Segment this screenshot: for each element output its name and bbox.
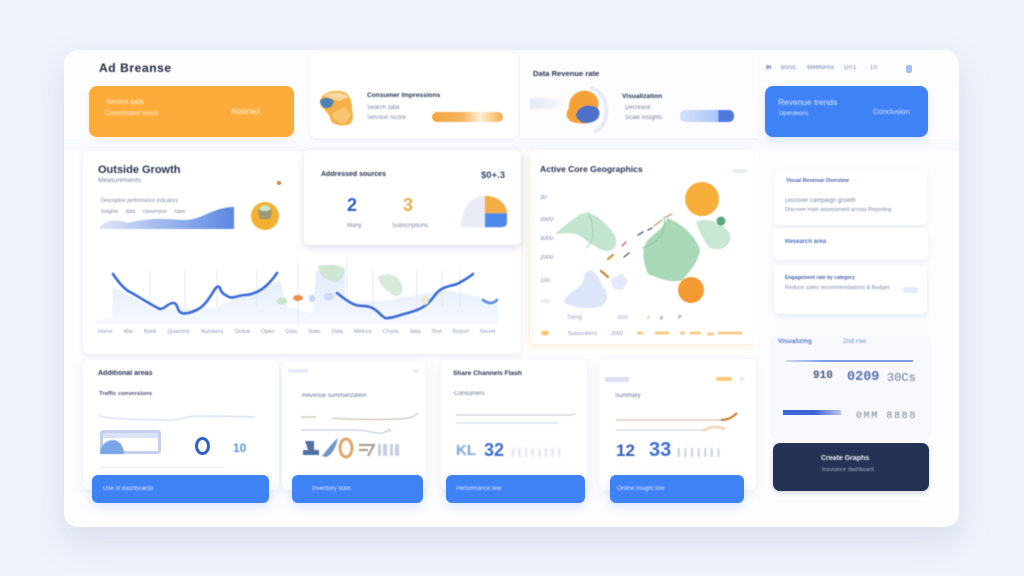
stats divider line	[786, 360, 913, 362]
button: card three	[446, 475, 585, 503]
button three label: Performance line	[456, 486, 501, 492]
nav item: date: D01	[844, 65, 857, 71]
panel: bottom card one	[83, 360, 279, 490]
button one label: Use of dashboards	[103, 486, 153, 492]
card three faded bars: IIIIIIII	[511, 445, 564, 460]
map marker: green	[716, 216, 726, 226]
map bottom label row	[567, 314, 682, 321]
metric caption one: Many	[347, 223, 362, 229]
axis label four: 2000	[540, 255, 553, 261]
metric number orange: 3	[403, 195, 413, 215]
map legend row: 2000	[611, 331, 623, 337]
orange panel label: Recent data	[106, 99, 144, 106]
insight two heading: Research area	[785, 239, 826, 245]
icon: orange head	[319, 90, 354, 126]
dark button caption: Insurance dashboard	[822, 467, 874, 473]
stats highlighted value: 0209	[847, 370, 879, 385]
card three heading: Share Channels Flash	[453, 370, 522, 377]
overview heading: Data Revenue rate	[533, 69, 599, 78]
insight three heading: Engagement rate by category	[785, 275, 855, 281]
axis label five: 100	[540, 278, 550, 284]
map circle: yellow	[685, 182, 719, 216]
metrics value: $0+.3	[481, 170, 505, 181]
stat line one: Search data	[367, 105, 399, 111]
area chart	[99, 206, 235, 230]
card four badge	[716, 377, 732, 381]
dark button title: Create Graphs	[821, 455, 869, 462]
map region: right green	[696, 220, 730, 249]
axis label one: 30	[540, 195, 547, 201]
metrics heading: Addressed sources	[321, 171, 386, 178]
insight one line one: Discover campaign growth	[785, 198, 856, 204]
card two dot	[414, 369, 418, 373]
overview line two: Scale Insights	[625, 115, 662, 121]
card two heading: Revenue summarization	[302, 393, 367, 399]
line chart	[96, 259, 499, 326]
map illustration	[540, 181, 743, 337]
map bottom label row: 2000	[617, 315, 628, 321]
blue panel value: Conclusion	[873, 107, 910, 116]
nav badge	[906, 65, 912, 73]
insight three tag	[903, 287, 918, 293]
card three label: KL	[456, 442, 476, 459]
map bottom label row: Sting	[567, 314, 582, 321]
panel: right side column	[760, 151, 959, 491]
map trail dashes	[601, 214, 672, 277]
stats group tag: 2nd row	[843, 338, 866, 345]
map region: left green	[555, 213, 616, 251]
orange panel caption: Coordinated result	[105, 110, 158, 117]
button: card two	[292, 475, 423, 503]
card two icon row	[302, 436, 400, 460]
stats first row values: 910	[813, 370, 833, 382]
panel: map card	[530, 150, 759, 344]
panel: orange summary	[89, 86, 294, 137]
card one subheading: Traffic conversions	[99, 391, 152, 397]
map card pale tag	[732, 169, 747, 173]
dashboard frame	[64, 50, 959, 527]
metric caption two: Subscriptions	[392, 223, 428, 229]
pie chart	[461, 195, 508, 228]
card four heading: Summary	[615, 393, 641, 399]
axis label six: 100	[540, 299, 550, 305]
blue panel label: Revenue trends	[778, 97, 837, 107]
blue panel caption: Operations	[779, 111, 808, 117]
nav item: webforms: Webforms	[807, 65, 834, 71]
progress bar: orange	[432, 112, 503, 122]
overview line one: Decrease	[625, 105, 651, 111]
stats group heading: Visualizing	[778, 338, 812, 345]
map axis labels	[540, 194, 554, 305]
card one ring	[195, 437, 210, 455]
panel: large line chart card	[83, 151, 521, 354]
metric number blue: 2	[347, 195, 357, 215]
stat line two: Session Score	[367, 115, 406, 121]
map card heading: Active Core Geographics	[540, 164, 643, 174]
top nav	[766, 64, 912, 73]
card four tag	[605, 377, 629, 382]
overview heading two: Visualization	[622, 93, 662, 100]
card one value: 10	[233, 441, 246, 455]
icon: orange bowl	[250, 201, 280, 231]
button: card one	[92, 475, 269, 503]
card one sparkline	[98, 414, 256, 422]
nav item: count: · 10	[865, 65, 878, 71]
card four value left: 12	[616, 441, 635, 460]
button four label: Online insight line	[617, 486, 664, 492]
button: dark call to action	[773, 443, 929, 491]
panel: bottom card two	[282, 362, 426, 490]
card: stats group	[770, 335, 932, 440]
chart card subheading: Measurements	[98, 177, 141, 184]
map region: centre green	[643, 218, 700, 281]
card four sparklines	[616, 412, 738, 432]
card one heading: Additional areas	[98, 370, 152, 377]
panel: blue summary	[765, 86, 928, 137]
area legend text: Descriptive performance indicators	[101, 198, 178, 204]
decorative pale bar	[530, 98, 565, 109]
map circle: orange	[678, 277, 704, 303]
map region: blue	[564, 270, 607, 308]
chart axis labels: Home Mar Bank Quarterly Numbers Global Open Data Stats Data Metrics Charts data Text Report Server	[98, 329, 496, 335]
card two sparklines	[300, 412, 418, 434]
orange panel value: Abstract	[231, 107, 260, 116]
panel: white backing behind map	[521, 150, 759, 354]
card three sparklines	[456, 412, 576, 424]
button: card four	[610, 475, 744, 503]
card one gauge box	[100, 430, 161, 454]
card: insight three	[774, 265, 927, 314]
panel: bottom card four	[599, 359, 756, 490]
map bottom label row: o	[647, 315, 650, 321]
panel: audience stat	[310, 52, 518, 138]
stats third value: 30Cs	[887, 371, 916, 385]
panel: bottom card three	[441, 360, 587, 490]
nav item: service: Bsrvc	[781, 65, 796, 71]
progress bar: blue	[680, 110, 734, 122]
card four dot	[740, 377, 744, 381]
insight one line two: Discover main assessment across Reporting	[785, 207, 892, 213]
card three subheading: Consumers	[454, 391, 485, 397]
nav item: in: In	[766, 65, 771, 71]
map bottom label row: p	[660, 315, 663, 321]
stats lower bar	[783, 410, 841, 415]
card two tag	[288, 369, 308, 373]
title: Ad Breanse	[99, 61, 172, 75]
map legend row: Subscribers	[568, 331, 597, 337]
axis label two: 3500	[540, 217, 553, 223]
stat heading: Consumer Impressions	[367, 92, 440, 99]
card four faded bars: IIIIIII	[677, 445, 723, 460]
panel: metrics with pie	[304, 150, 521, 245]
button two label: Inventory stats	[312, 486, 351, 492]
area legend text two: Insights data conversion rates	[101, 209, 185, 215]
card three value: 32	[484, 440, 504, 460]
card: insight two	[773, 228, 928, 260]
panel: data overview	[520, 52, 758, 138]
map bottom label row: P	[678, 315, 682, 321]
orange dot	[277, 181, 281, 185]
chart card heading: Outside Growth	[98, 164, 180, 176]
card four value right: 33	[649, 439, 671, 461]
band behind lower panels	[64, 139, 959, 151]
axis label three: 3000	[540, 236, 553, 242]
insight three line: Reduce sales recommendations & Budget	[785, 285, 889, 291]
card one gauge	[99, 439, 124, 455]
stats lower values: 0MM 8888	[856, 411, 917, 422]
icon: orange and blue cloud	[566, 86, 608, 134]
insight one heading: Visual Revenue Overview	[786, 178, 849, 184]
card: insight one	[774, 170, 927, 225]
map legend row	[541, 331, 742, 337]
card one rule	[100, 467, 225, 468]
